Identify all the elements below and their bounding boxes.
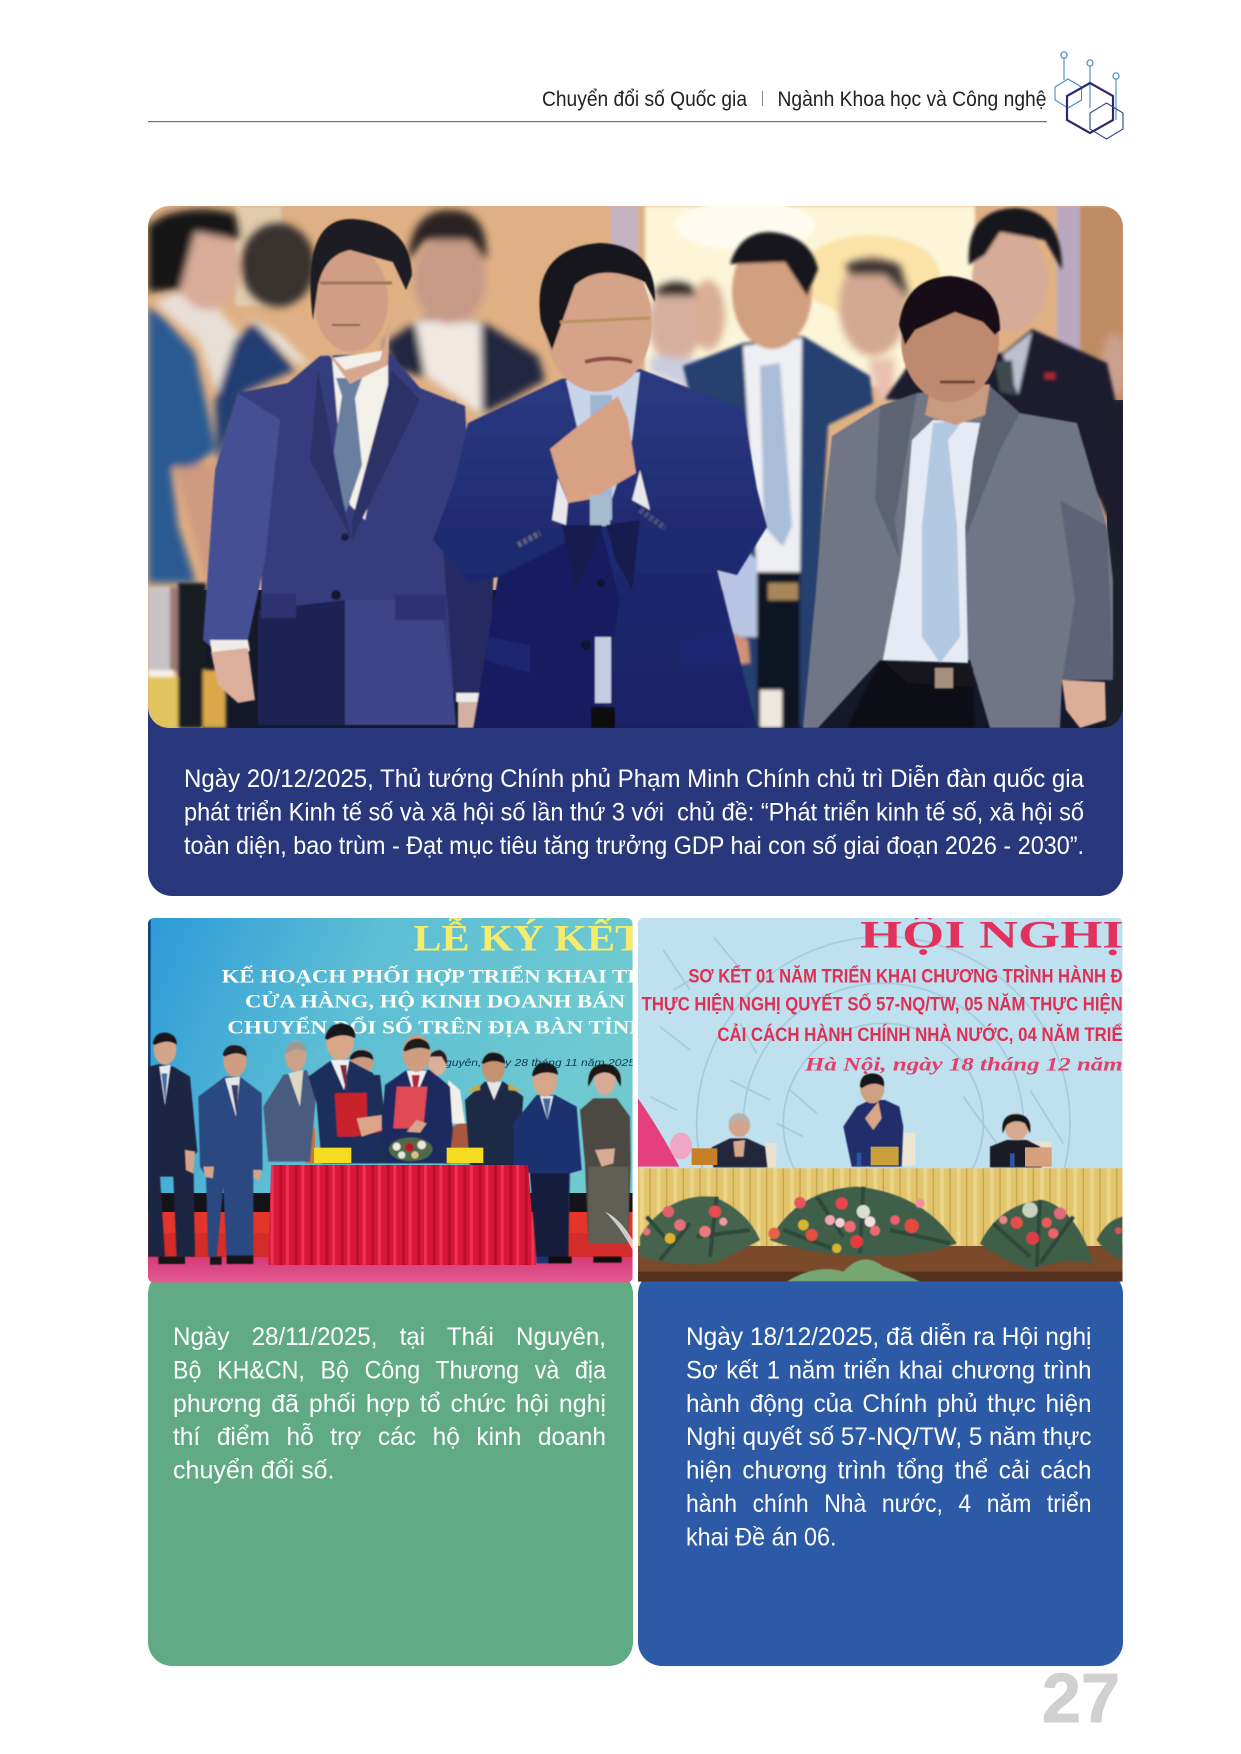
green caption background [148, 1270, 633, 1666]
icon: hexagon network logo [1055, 52, 1123, 139]
blue caption text: hành chính Nhà nước, 4 năm triển [686, 1490, 1092, 1518]
main caption text: toàn diện, bao trùm - Đạt mục tiêu tăng trưởng GDP hai con số giai đoạn 2026 - 2030”. [184, 832, 1084, 860]
back right man [148, 208, 1124, 728]
photo: leaders walking at the forum [148, 200, 1129, 728]
header separator [762, 91, 763, 106]
wood base [638, 1246, 1123, 1283]
blue caption text: Ngày 18/12/2025, đã diễn ra Hội nghị [686, 1322, 1092, 1351]
header text: sector: Ngành Khoa học và Công nghệ [778, 88, 1046, 111]
photo: conference stage [638, 911, 1123, 1310]
banner title: THỰC HIỆN NGHỊ QUYẾT SỐ 57-NQ/TW, 05 NĂM THỰC HIỆN [642, 992, 1123, 1016]
left lower furniture [148, 587, 178, 672]
blue caption text [686, 1322, 1092, 1551]
green caption text: Bộ KH&CN, Bộ Công Thương và địa [173, 1356, 606, 1384]
blue caption text: Sơ kết 1 năm triển khai chương trình [686, 1356, 1092, 1384]
banner title: HỘI NGHỊ [860, 911, 1123, 956]
front centre man [433, 369, 767, 728]
header breadcrumb [542, 88, 1046, 111]
blue caption background [638, 1270, 1123, 1666]
officials at table [712, 1073, 1042, 1167]
flowers [389, 1137, 433, 1161]
name plates [692, 1148, 717, 1165]
banner title: CỬA HÀNG, HỘ KINH DOANH BÁN [245, 990, 625, 1012]
panel: Thai Nguyen signing card [148, 916, 647, 1666]
banner title: CẢI CÁCH HÀNH CHÍNH NHÀ NƯỚC, 04 NĂM TRIỂ [717, 1022, 1123, 1046]
green caption text: thí điểm hỗ trợ các hộ kinh doanh [173, 1422, 606, 1451]
table with pleated cloth [268, 1165, 536, 1265]
chairs [305, 1128, 315, 1163]
main caption background [148, 640, 1123, 896]
bronze drum pattern [650, 936, 1071, 1168]
swoosh mark [605, 1212, 633, 1250]
photo: signing ceremony [148, 916, 647, 1283]
green caption text: Ngày 28/11/2025, tại Thái Nguyên, [173, 1323, 606, 1351]
panel: Hanoi conference card [638, 911, 1123, 1666]
name plates [314, 1148, 351, 1163]
banner title [222, 916, 647, 1069]
banner title: guyên, ngày 28 tháng 11 năm 2025 [445, 1058, 636, 1069]
banner title: Hà Nội, ngày 18 tháng 12 năm [804, 1055, 1123, 1076]
green caption text: phương đã phối hợp tổ chức hội nghị [173, 1390, 606, 1418]
main caption text: Ngày 20/12/2025, Thủ tướng Chính phủ Phạm Minh Chính chủ trì Diễn đàn quốc gia [184, 764, 1084, 793]
water bottles [857, 1153, 861, 1166]
pink drape and lotus [638, 1098, 679, 1167]
people on stage [148, 1023, 631, 1265]
green caption text: chuyển đổi số. [173, 1457, 334, 1485]
header rule [148, 121, 1047, 122]
blurred background people [148, 209, 1129, 583]
front left man [442, 400, 494, 694]
front right man [803, 386, 1113, 728]
banner title: KẾ HOẠCH PHỐI HỢP TRIỂN KHAI TH [222, 966, 645, 988]
green caption text [173, 1323, 606, 1485]
header text: section: Chuyển đổi số Quốc gia [542, 88, 747, 111]
main caption text [184, 764, 1084, 860]
main caption text: phát triển Kinh tế số và xã hội số lần thứ 3 với chủ đề: “Phát triển kinh tế số, xã hội số [184, 798, 1084, 826]
tablecloth [638, 1168, 1123, 1248]
dark lower backdrop [203, 590, 1124, 728]
banner title: CHUYỂN ĐỔI SỐ TRÊN ĐỊA BÀN TỈNH [227, 1016, 647, 1038]
banner title [642, 911, 1123, 1076]
top right man [885, 329, 1124, 560]
chairs [765, 1143, 776, 1167]
page number: 27 [1042, 1659, 1120, 1737]
blue caption text: khai Đề án 06. [686, 1523, 836, 1551]
blue caption text: Nghị quyết số 57-NQ/TW, 5 năm thực [686, 1423, 1092, 1451]
panel: main photo card [148, 200, 1129, 896]
blue caption text: hành động của Chính phủ thực hiện [686, 1390, 1092, 1418]
flower arrangements [640, 1187, 1123, 1282]
banner title: LỄ KÝ KẾT [413, 916, 643, 960]
banner title: SƠ KẾT 01 NĂM TRIỂN KHAI CHƯƠNG TRÌNH HÀNH Đ [688, 965, 1123, 988]
blue caption text: hiện chương trình tổng thể cải cách [686, 1457, 1092, 1485]
